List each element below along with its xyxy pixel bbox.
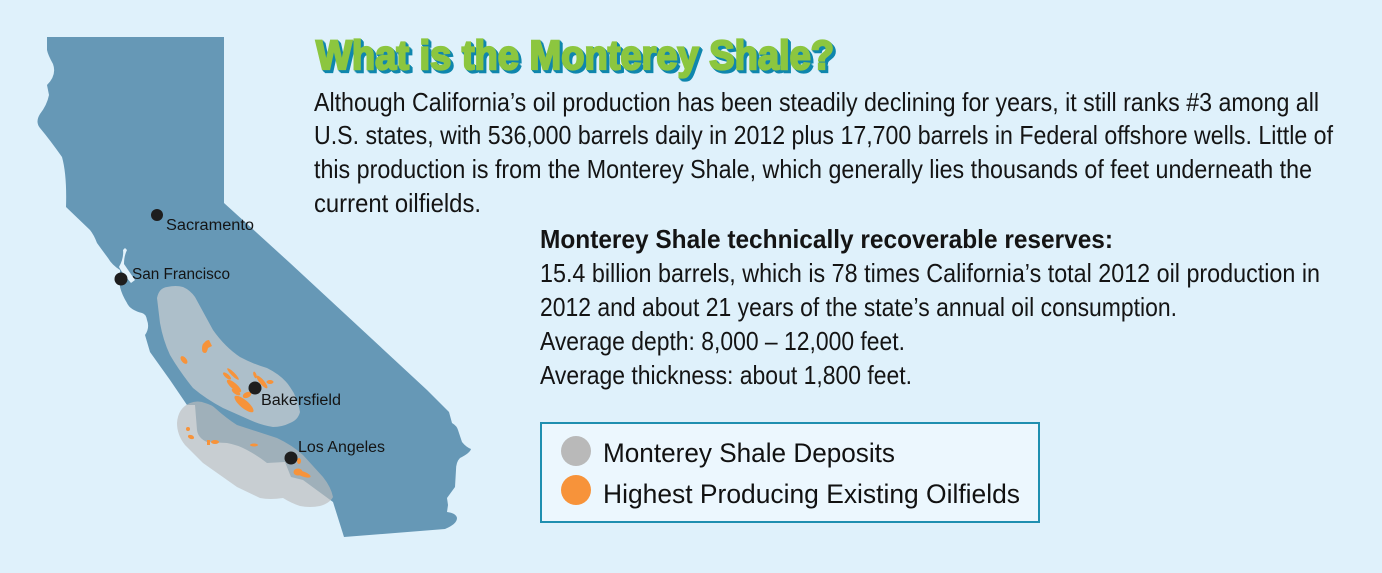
city: Los Angeles: Los Angeles <box>298 439 385 456</box>
intro paragraph <box>314 87 1334 218</box>
map of California <box>38 37 471 537</box>
city: San Francisco: San Francisco <box>132 266 230 283</box>
city: Bakersfield: Bakersfield <box>261 392 341 409</box>
legend item: oilfields: Highest Producing Existing Oilfields <box>603 479 1020 509</box>
oilfields <box>179 340 311 479</box>
southern shale deposit <box>177 402 333 507</box>
intro paragraph: current oilfields. <box>314 188 481 218</box>
northern shale deposit <box>157 286 300 427</box>
reserves text block: Average thickness: about 1,800 feet. <box>540 360 912 390</box>
reserves text block: 2012 and about 21 years of the state’s annual oil consumption. <box>540 292 1177 322</box>
title: What is the Monterey Shale? <box>316 32 834 78</box>
city: Bakersfield <box>248 382 341 409</box>
San Francisco Bay <box>119 248 135 283</box>
city: Sacramento: Sacramento <box>166 217 254 234</box>
legend item: shale deposits: Monterey Shale Deposits <box>603 438 895 468</box>
city: Sacramento <box>151 209 254 234</box>
reserves text block: Average depth: 8,000 – 12,000 feet. <box>540 326 905 356</box>
reserves heading: Monterey Shale technically recoverable reserves: <box>540 224 1113 254</box>
reserves text block <box>540 224 1320 390</box>
city: Los Angeles <box>284 439 385 464</box>
legend <box>541 423 1039 522</box>
state outline <box>38 37 471 537</box>
